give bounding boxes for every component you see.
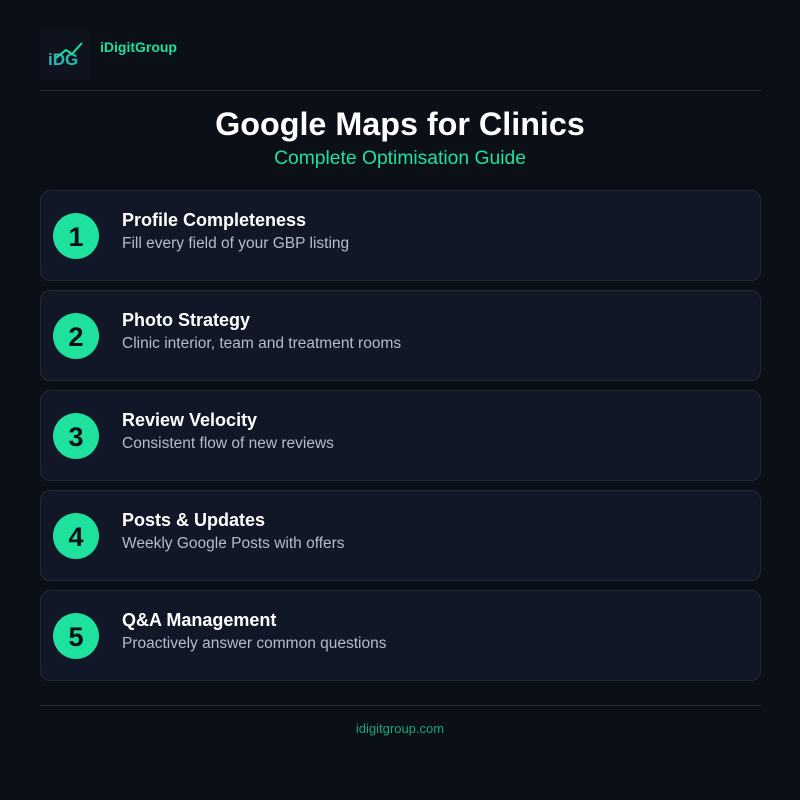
logo icon: iDG [48, 50, 78, 69]
brand name: iDigitGroup [100, 39, 177, 55]
card 3: Consistent flow of new reviews [122, 435, 334, 452]
card 5: Q&A Management [122, 610, 276, 630]
logo icon [40, 30, 90, 80]
card 1 [40, 190, 761, 281]
card 4: 4 [68, 522, 84, 552]
card 1: 1 [68, 222, 84, 252]
card 4: Weekly Google Posts with offers [122, 535, 345, 552]
card 2: 2 [68, 322, 84, 352]
card 1: Profile Completeness [122, 210, 306, 230]
card 3: Review Velocity [122, 410, 257, 430]
card 2: Clinic interior, team and treatment rooms [122, 335, 401, 352]
title: Google Maps for Clinics [215, 106, 585, 142]
card 3: 3 [68, 422, 84, 452]
card 4: Posts & Updates [122, 510, 265, 530]
card 5: 5 [68, 622, 84, 652]
footer: idigitgroup.com [356, 721, 444, 736]
card 4 [40, 490, 761, 581]
card 5: Proactively answer common questions [122, 635, 386, 652]
card 2 [40, 290, 761, 381]
card 3 [40, 390, 761, 481]
card 5 [40, 590, 761, 681]
card 1: Fill every field of your GBP listing [122, 235, 349, 252]
card 2: Photo Strategy [122, 310, 250, 330]
subtitle: Complete Optimisation Guide [274, 148, 526, 169]
